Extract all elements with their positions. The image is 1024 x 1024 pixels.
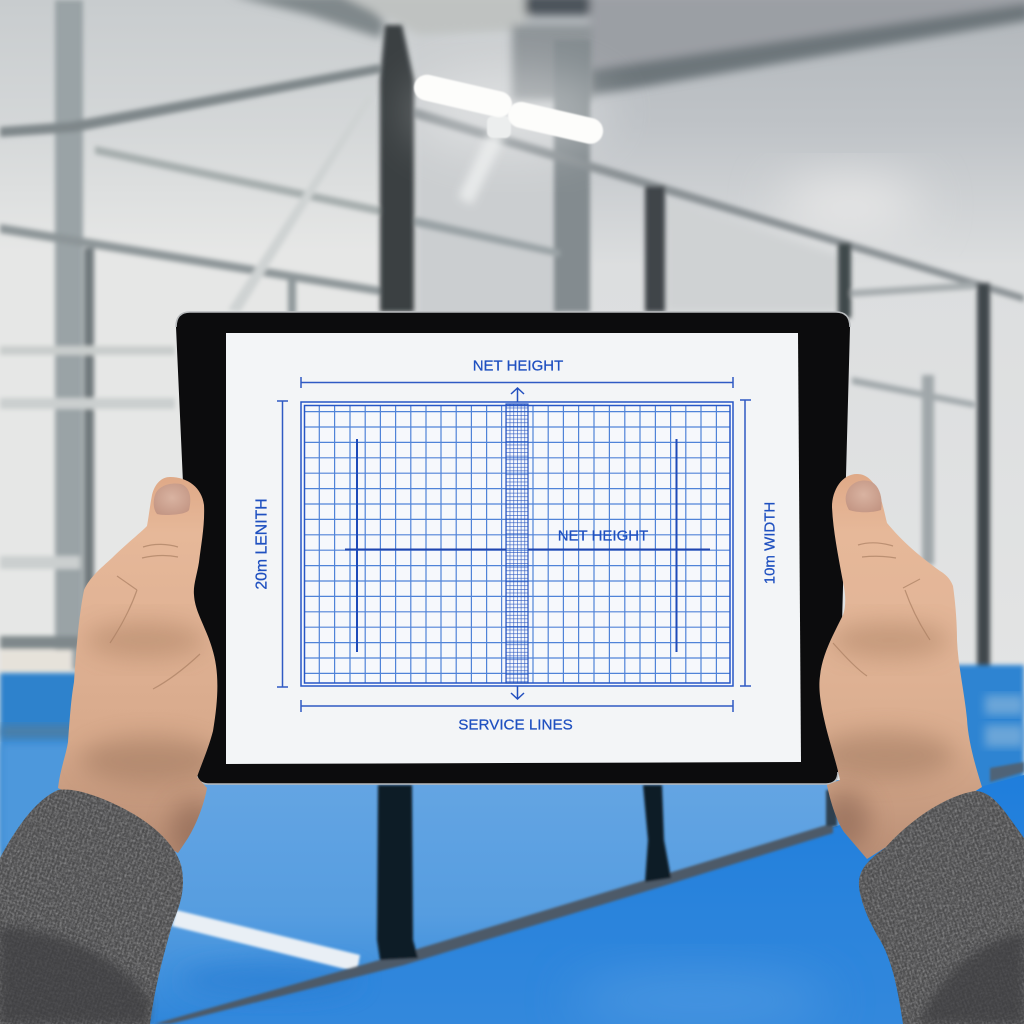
right hand: [815, 474, 982, 859]
right thumbnail: [846, 481, 882, 512]
left hand: [58, 477, 220, 860]
left thumb knuckle creases: [110, 544, 200, 689]
court grid: [304, 405, 730, 683]
tablet: [176, 312, 850, 784]
label: 10m width: 10m WIDTH: [762, 502, 778, 584]
tablet edge highlight: [176, 312, 850, 784]
court blueprint diagram: [254, 358, 778, 734]
background: steel frame of the padel court: [0, 0, 1024, 773]
white court line: [172, 910, 360, 972]
right service line: [676, 439, 678, 652]
net arrow up: [511, 388, 524, 402]
right thumb knuckle creases: [833, 543, 930, 676]
right sleeve: [859, 791, 1024, 1024]
right hand shading: [815, 622, 955, 850]
background: hall walls and ceiling: [0, 0, 1024, 700]
label: 20m length: 20m LENITH: [254, 498, 270, 590]
left sleeve: [0, 790, 183, 1024]
left service line: [356, 439, 358, 652]
right dimension line: [740, 400, 751, 686]
label: net height centre: NET HEIGHT: [558, 528, 648, 544]
ceiling light fixture: [410, 72, 610, 205]
tablet body: [176, 312, 850, 784]
lower fence posts and rail: [154, 762, 1024, 1024]
right sleeve fold: [918, 932, 1024, 1024]
left dimension line: [277, 401, 288, 687]
background: ceiling beams: [230, 0, 1024, 100]
bottom dimension line: [301, 700, 733, 712]
net band: [506, 404, 528, 683]
label: service lines: SERVICE LINES: [458, 716, 573, 734]
screen: [226, 333, 801, 764]
left hand skin: [58, 477, 217, 853]
court boundary: [301, 402, 733, 686]
blue court floor: [0, 665, 1024, 1024]
left sleeve fold: [0, 926, 150, 1024]
left thumbnail: [154, 483, 190, 515]
centre service line: [345, 548, 710, 550]
top dimension line: [301, 377, 733, 388]
grid background tint: [301, 402, 733, 686]
right hand skin: [819, 474, 982, 859]
label: net height top: NET HEIGHT: [473, 358, 563, 374]
net arrow down: [511, 686, 524, 699]
left hand shading: [80, 622, 220, 860]
